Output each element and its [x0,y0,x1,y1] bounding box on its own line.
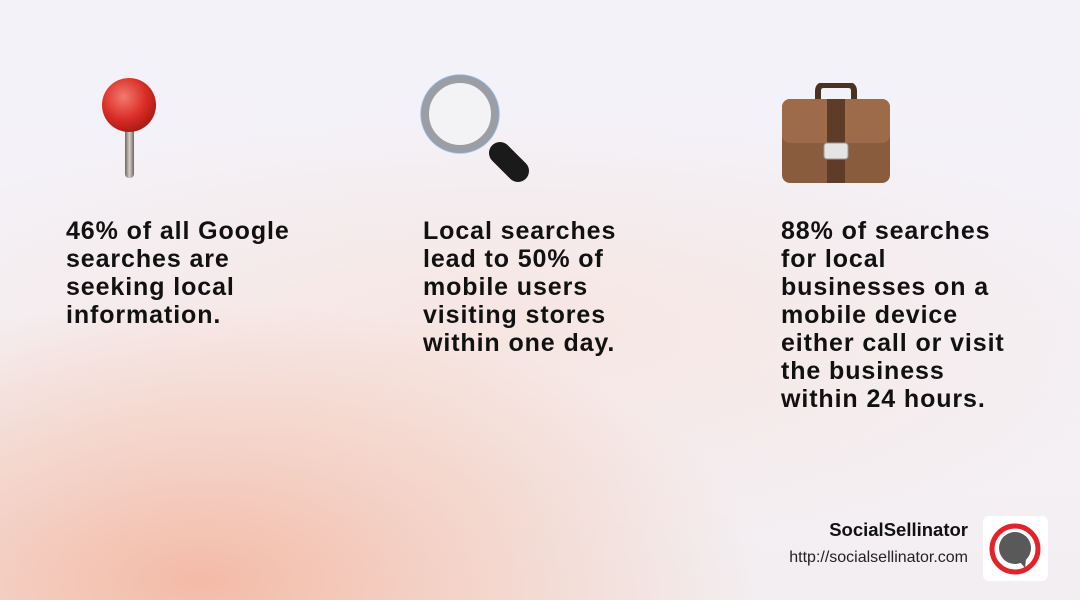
text block: mobile device: businesses on a [781,273,989,301]
text block: local searches: mobile users [423,273,588,301]
text block: google searches: information. [66,301,221,329]
icon: briefcase [782,83,890,183]
text block: google searches: 46% of all Google [66,217,290,245]
text block: mobile device: 88% of searches [781,217,990,245]
text block: local searches: lead to 50% of [423,245,604,273]
icon: magnifying glass [420,74,529,182]
text block: mobile device: within 24 hours. [781,385,986,413]
text block: local searches: within one day. [423,329,615,357]
icon: red pushpin [102,78,156,178]
text block: google searches: searches are [66,245,230,273]
text block: mobile device: either call or visit [781,329,1005,357]
text block: mobile device: for local [781,245,886,273]
text block: mobile device: the business [781,357,945,385]
brand name: SocialSellinator [829,519,968,540]
text block: mobile device: mobile device [781,301,958,329]
text block: google searches: seeking local [66,273,235,301]
text block: google searches [66,217,290,329]
text block: local searches: visiting stores [423,301,606,329]
text block: mobile device [781,217,1005,413]
logo [983,516,1048,581]
text block: local searches: Local searches [423,217,616,245]
brand url: http://socialsellinator.com [789,549,968,566]
text block: local searches [423,217,616,357]
